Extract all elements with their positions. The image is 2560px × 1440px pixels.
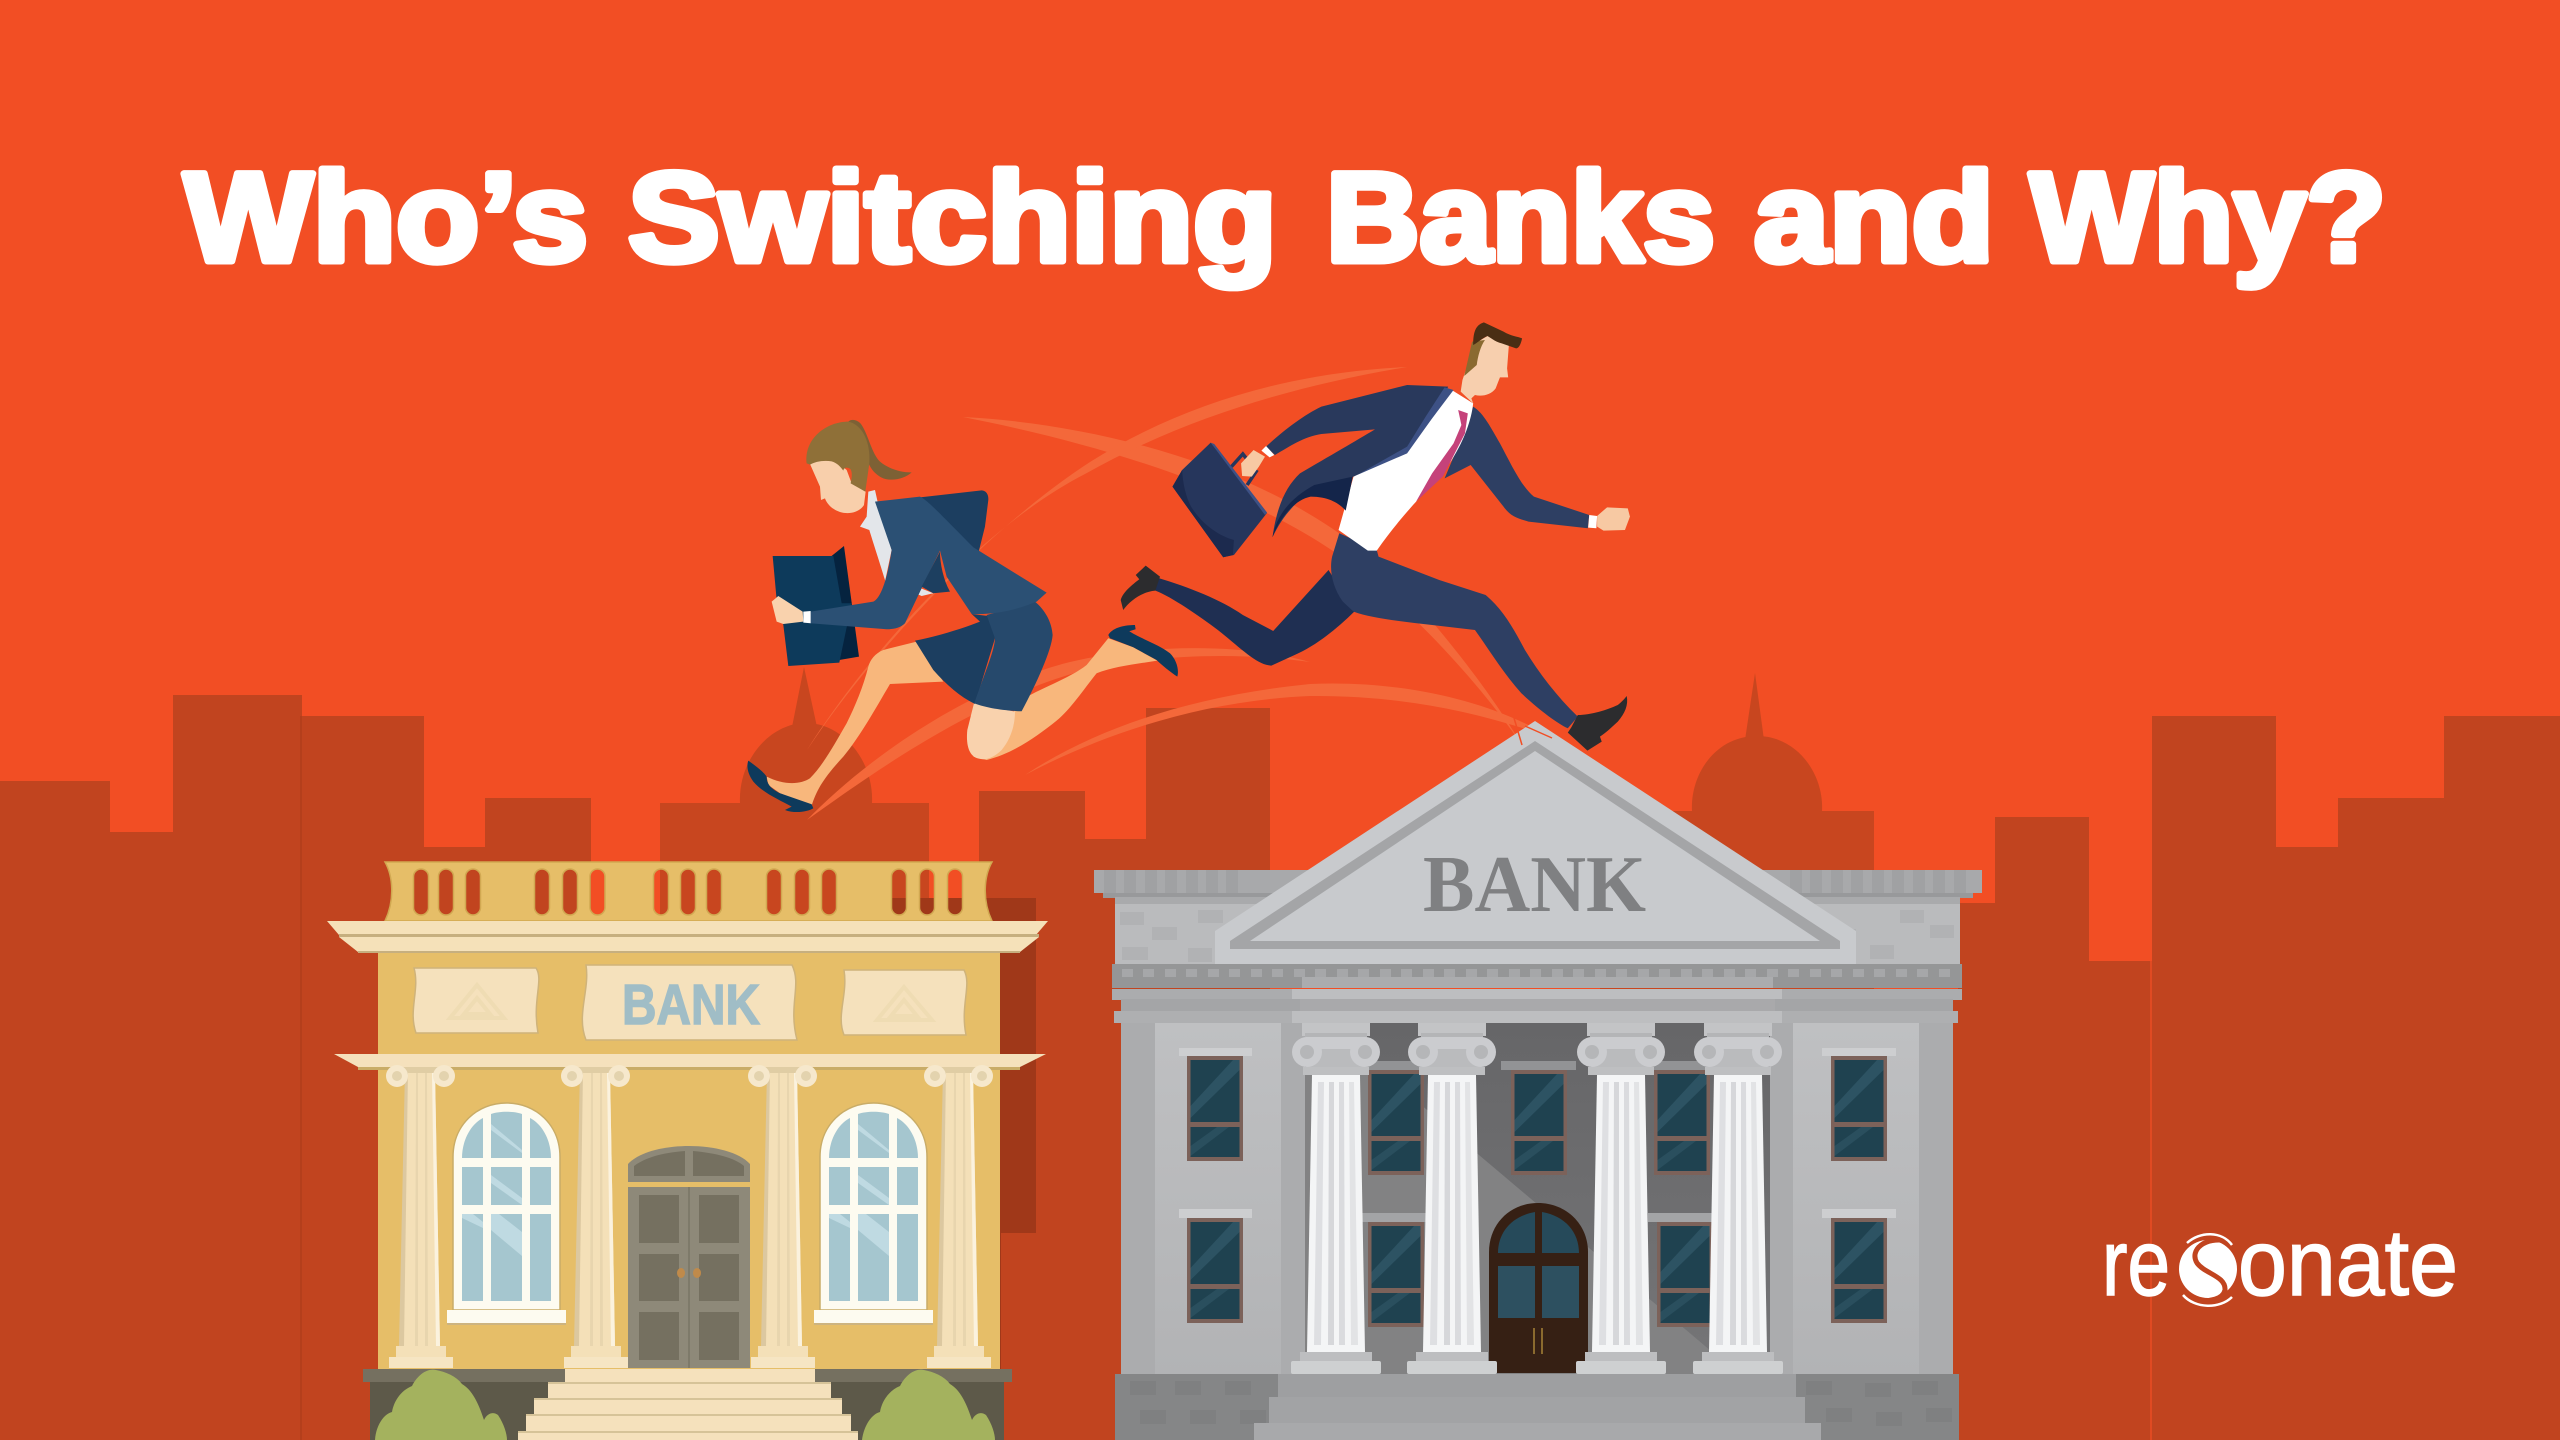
title: Banks [1326, 146, 1715, 288]
man jacket back and tail [1266, 385, 1454, 537]
front steps [1254, 1374, 1821, 1440]
man rear leg [1155, 570, 1354, 666]
title [184, 146, 2386, 288]
shaded portico recess [1305, 1023, 1770, 1374]
wall [378, 950, 1000, 1370]
window center lower right [1657, 1222, 1713, 1327]
window side lower left [1187, 1218, 1243, 1323]
window side upper right [1831, 1056, 1887, 1161]
logo S emblem [2179, 1234, 2237, 1306]
motion swooshes [807, 367, 1552, 820]
title: and [1754, 146, 1994, 288]
stone plinths [1115, 1374, 1959, 1440]
portico column 1 [1291, 1023, 1381, 1374]
building shadow [892, 898, 1036, 1440]
balustrade with openings [385, 862, 992, 921]
left plaque [413, 968, 539, 1033]
double door [628, 1187, 750, 1368]
lower cornice [334, 1054, 1046, 1070]
pediment: BANK [1423, 841, 1646, 929]
entablature [1112, 964, 1962, 1023]
yellow bank building [327, 862, 1048, 1440]
title: Why? [2030, 146, 2386, 288]
woman blouse [860, 490, 933, 596]
businesswoman running [747, 420, 1178, 812]
upper brick wall [1115, 897, 1960, 965]
window center lower left [1368, 1222, 1424, 1327]
column left inner [561, 1065, 630, 1368]
resonate logo: re [2102, 1210, 2170, 1315]
gray bank building [1094, 721, 1982, 1440]
main wall [1121, 1023, 1953, 1374]
man hands and cuffs [1241, 446, 1630, 531]
right plaque [841, 970, 967, 1035]
left bush [375, 1370, 507, 1440]
column right inner [748, 1065, 817, 1368]
column left outer [386, 1065, 455, 1368]
window side upper left [1187, 1056, 1243, 1161]
roof impact marks [1514, 718, 1552, 745]
portico column 2 [1407, 1023, 1497, 1374]
right arched window [814, 1103, 933, 1325]
man briefcase handle [1231, 454, 1257, 485]
woman jacket and arm [810, 497, 1047, 629]
window center upper middle [1511, 1070, 1567, 1175]
center plaque with BANK [582, 965, 797, 1040]
window lintels [1179, 1048, 1896, 1222]
man head [1461, 322, 1522, 403]
resonate logo [2102, 1210, 2458, 1315]
woman rear sleeve [920, 490, 988, 553]
pediment [1215, 721, 1856, 964]
city skyline silhouette [0, 667, 2560, 1440]
column right outer [924, 1065, 993, 1368]
man briefcase [1172, 443, 1267, 557]
man shirt [1339, 390, 1473, 551]
left arched window [447, 1103, 566, 1325]
woman hand [772, 596, 811, 624]
title: Who’s [184, 146, 588, 288]
woman shoes [747, 625, 1178, 812]
center plaque with BANK: BANK [622, 973, 760, 1037]
man necktie [1416, 410, 1468, 502]
woman head [806, 422, 869, 513]
woman front leg [767, 642, 943, 806]
window center upper left [1368, 1070, 1424, 1175]
door transom [628, 1146, 750, 1182]
upper cornice [327, 921, 1048, 953]
resonate logo: onate [2238, 1210, 2458, 1315]
title: Switching [628, 146, 1277, 288]
window side lower right [1831, 1218, 1887, 1323]
entrance steps [518, 1369, 858, 1440]
woman folder [773, 546, 859, 666]
woman ponytail [848, 420, 912, 480]
woman skirt [915, 602, 1053, 711]
man front arm [1445, 407, 1589, 528]
right bush [862, 1370, 995, 1440]
man front leg [1331, 533, 1578, 728]
man front shoe [1568, 696, 1627, 751]
businessman running [1121, 322, 1630, 751]
man rear shoe [1121, 566, 1160, 610]
window center upper right [1654, 1070, 1710, 1175]
attic parapet [1094, 870, 1982, 898]
arched door [1489, 1203, 1588, 1373]
plinth [363, 1369, 1012, 1440]
woman rear leg [967, 638, 1157, 760]
portico column 4 [1693, 1023, 1783, 1374]
portico column 3 [1576, 1023, 1666, 1374]
